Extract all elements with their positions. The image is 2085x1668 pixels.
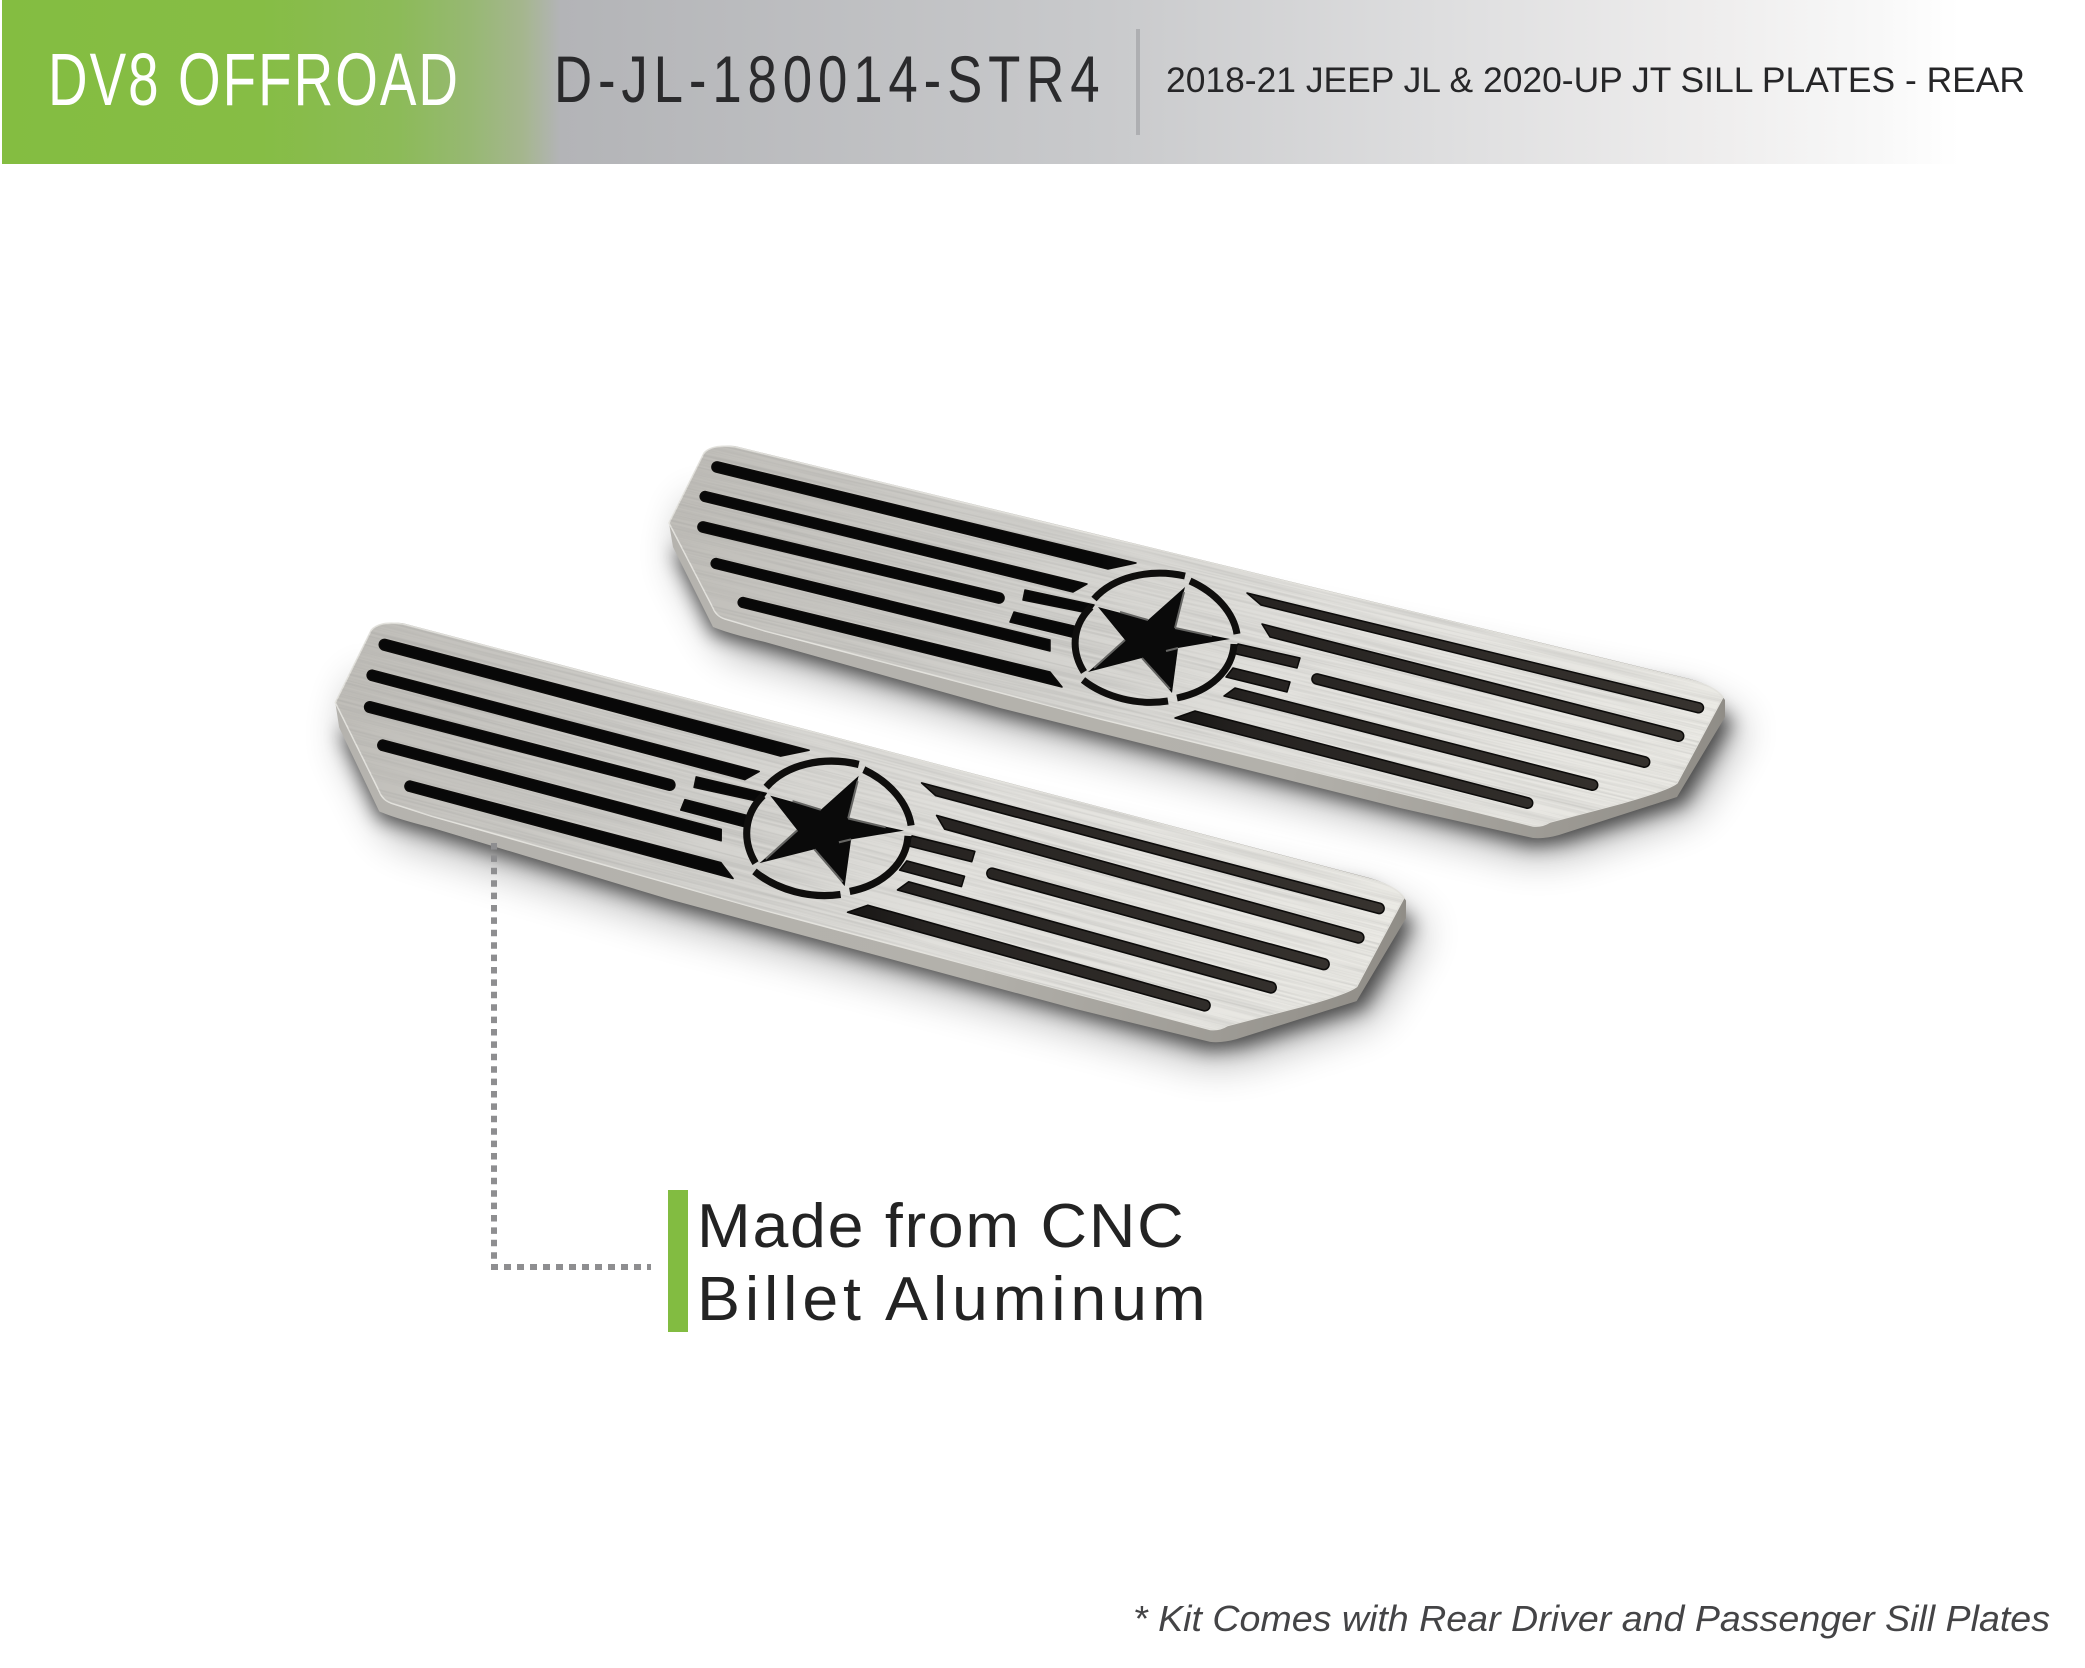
footnote: * Kit Comes with Rear Driver and Passenger Sill Plates	[1133, 1598, 2050, 1639]
product title: 2018-21 JEEP JL & 2020-UP JT SILL PLATES - REAR	[1166, 61, 2025, 100]
dotted leader line	[491, 843, 651, 1270]
star emblem ring	[746, 760, 912, 897]
callout text: Billet Aluminum	[697, 1265, 1206, 1334]
sill plate: front	[323, 622, 1438, 1084]
callout text	[697, 1192, 1206, 1334]
part number: D-JL-180014-STR4	[554, 42, 1100, 116]
star emblem	[759, 775, 904, 887]
callout text: Made from CNC	[697, 1192, 1184, 1261]
brand name: DV8 OFFROAD	[48, 38, 458, 121]
callout accent bar	[668, 1190, 688, 1332]
sill plate: rear (back)	[657, 446, 1757, 878]
star emblem	[1088, 587, 1230, 693]
callout	[668, 1190, 1206, 1334]
slots	[698, 462, 1703, 808]
star emblem ring	[1075, 573, 1237, 702]
header banner	[2, 0, 2085, 164]
slots	[363, 639, 1386, 1013]
